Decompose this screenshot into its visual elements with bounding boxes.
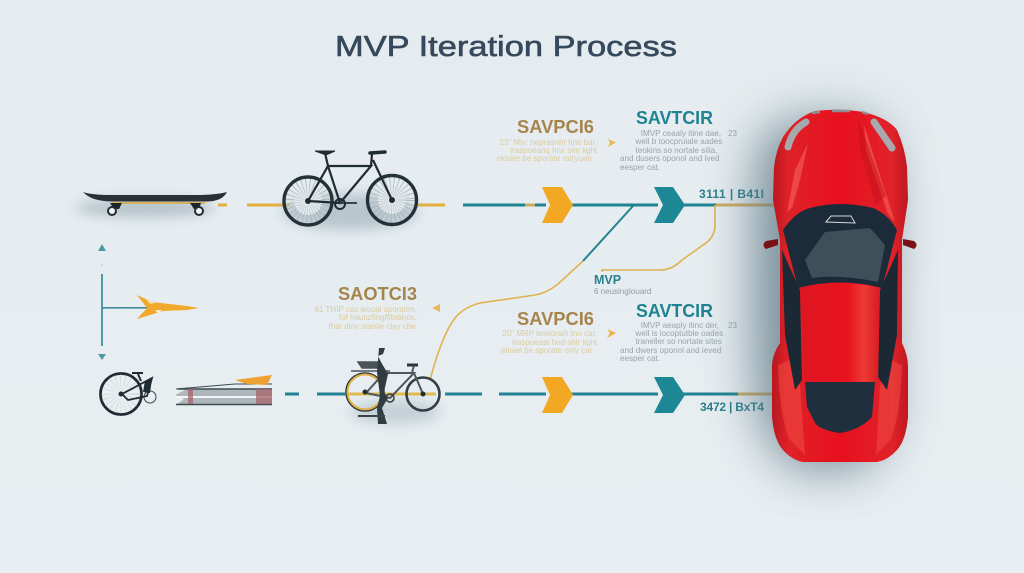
icon: vertical double arrow	[98, 244, 150, 360]
chevron: top orange	[542, 187, 573, 223]
text block: top orange: ekiuler be sporate ratryuan.	[497, 154, 594, 163]
arrow: bottom small orange	[607, 329, 616, 338]
icon: bicycle with rack	[345, 348, 440, 424]
roof	[800, 283, 880, 382]
chevron: bottom teal	[654, 377, 685, 413]
text block: top orange: traspoeanq hnx sinr light	[510, 146, 598, 155]
text block: bottom teal: and dwers oponol and ieved	[620, 346, 721, 355]
icon: skateboard	[75, 192, 227, 217]
text block: top teal: well b toocpruiale aades	[631, 137, 722, 146]
hood highlights	[787, 125, 895, 222]
text block: left orange: fof haunzfingffitebhos,	[339, 313, 417, 322]
text block: left orange: SAOTCI3	[338, 284, 417, 304]
car	[752, 110, 916, 470]
text block: bottom teal: SAVTCIR	[636, 301, 713, 321]
nose vents	[812, 111, 868, 114]
text block: left orange	[315, 284, 418, 331]
text block: bottom teal: traneller so nortate sites	[631, 337, 722, 346]
text block: top orange	[497, 117, 598, 163]
label: MVP	[594, 273, 651, 296]
text block: bottom teal: 23	[728, 321, 738, 330]
text block: bottom orange: 20" MRP tessoraih tno car,	[502, 329, 597, 338]
text block: top teal	[620, 108, 738, 172]
metric: bottom: 3472 | BxT4	[700, 400, 764, 414]
bottom timeline	[285, 392, 775, 396]
arrow: top small orange	[608, 139, 616, 147]
text block: bottom orange: etiuiel be sporate only car.	[501, 346, 594, 355]
metric: top: 3111 | B41I	[699, 187, 764, 201]
text block: top teal: teokins so nortale silla,	[631, 146, 717, 155]
text block: top teal: SAVTCIR	[636, 108, 713, 128]
windshield	[783, 204, 897, 288]
text block: bottom teal: IMVP aeaply itinc der,	[634, 321, 719, 330]
text block: bottom orange: traspoeast hed shir light	[512, 338, 598, 347]
connector lines	[430, 205, 715, 380]
text block: top teal: and dusers oponol and ived	[620, 154, 719, 163]
text block: top teal: eesper cat.	[620, 163, 660, 172]
mirrors	[764, 239, 916, 249]
text block: bottom orange	[501, 309, 598, 355]
title: MVP Iteration Process	[335, 31, 677, 63]
top timeline	[218, 204, 775, 206]
text block: top orange: SAVPCI6	[517, 117, 594, 137]
text block: bottom orange: SAVPCI6	[517, 309, 594, 329]
rear window	[805, 382, 875, 433]
icon: small bicycle	[100, 373, 156, 414]
label: MVP: MVP	[594, 273, 621, 287]
text block: bottom teal: eesper cat.	[620, 354, 660, 363]
icon: bicycle	[282, 151, 418, 230]
text block: top teal: 23	[728, 129, 738, 138]
text block: top orange: 23" Miv: neprasnht hno bar,	[499, 138, 597, 147]
text block: bottom teal	[620, 301, 738, 363]
arrow: left small orange	[432, 304, 440, 312]
side windows	[782, 250, 898, 390]
chevron: bottom orange	[542, 377, 573, 413]
headlights	[788, 122, 892, 148]
text block: left orange: 61 THIP cas wooal sporaten,	[315, 305, 417, 314]
text block: bottom teal: well is locoptutble oades	[631, 329, 723, 338]
chevron: top teal	[654, 187, 685, 223]
text block: left orange: that dinv stanile clay cbe.	[329, 322, 418, 331]
icon: orange arrow	[137, 295, 199, 319]
icon: rocket shape	[175, 375, 272, 405]
label: MVP: 6 neusingIouard	[594, 287, 651, 296]
text block: top teal: IMVP ceaaly itine dae,	[634, 129, 721, 138]
